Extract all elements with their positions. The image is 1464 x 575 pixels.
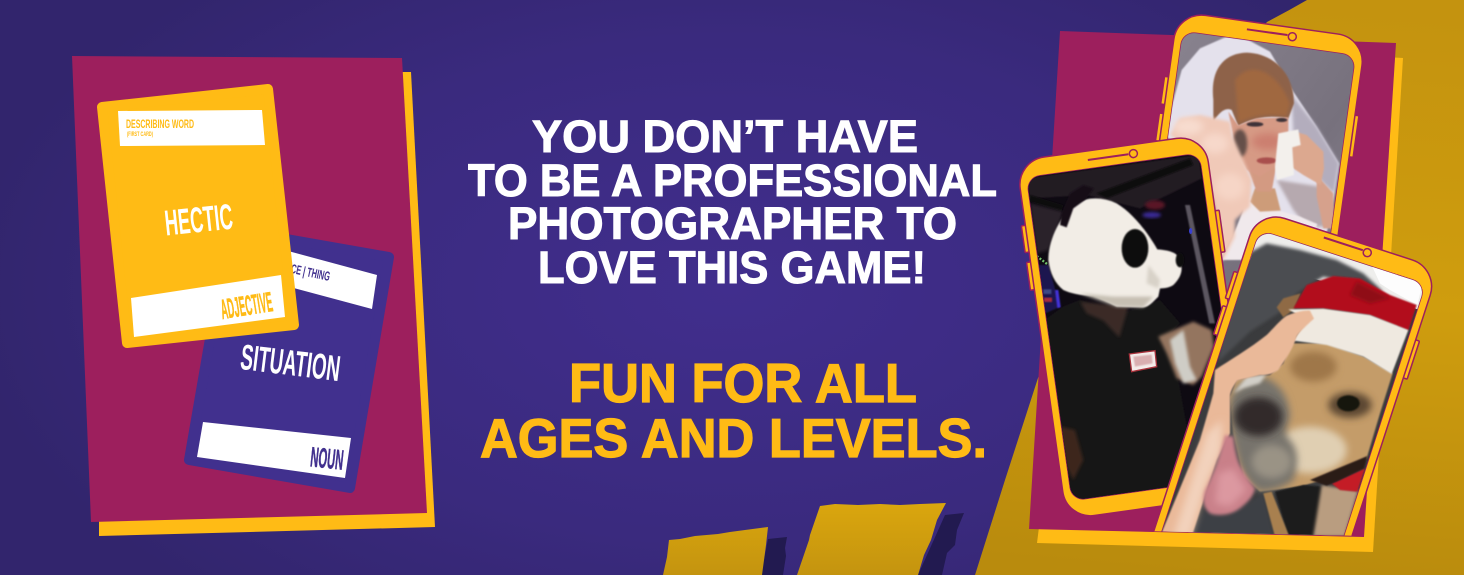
heading: main message: PHOTOGRAPHER TO [508,198,957,249]
purple noun card: SITUATION [238,336,343,389]
blurred hand [1158,322,1214,385]
party lights [1038,265,1060,313]
panel: game cards: ADJECTIVE [218,286,275,325]
maroon sheet [1029,31,1396,537]
dog fur [1230,343,1393,492]
panda eye patch [1122,229,1148,268]
face [1228,112,1288,177]
phone: dog in santa hat photo [1154,216,1432,536]
eye [1337,395,1360,411]
panda ear [1060,185,1094,227]
yellow adjective card: (FIRST CARD) [127,132,153,138]
heading: main message [468,111,997,293]
arm and hand [1317,175,1334,228]
subheading: fun for all [480,352,987,469]
gold diagonal background shape [975,0,1464,575]
panda nose [1176,253,1184,267]
neck [1080,302,1128,337]
pole [1185,205,1215,323]
hair [1213,53,1294,126]
panel: game cards [72,56,435,536]
white background [1250,234,1422,310]
ceiling [1027,155,1202,208]
name tag [1129,351,1157,372]
hat tan patch [1277,293,1301,317]
yellow adjective card: HECTIC [163,196,235,244]
maroon sheet [72,56,427,522]
blurred fist [1170,115,1252,260]
panda head [1048,198,1182,307]
heading: main message: TO BE A PROFESSIONAL [468,155,997,206]
torn gold stripes [663,503,964,575]
tongue [1203,435,1255,515]
hand and arm [1160,311,1314,537]
gray blanket [1218,243,1383,362]
yellow adjective card [102,89,294,343]
yellow adjective card: DESCRIBING WORD [126,117,194,131]
santa hat [1293,276,1417,331]
subheading: fun for all: FUN FOR ALL [569,352,917,414]
phone: bride photo [1156,14,1362,290]
muzzle [1230,377,1297,492]
heading: main message: YOU DON’T HAVE [532,111,918,162]
yellow backing sheet [99,72,435,536]
black shirt [1045,300,1187,503]
eyes and mouth [1247,122,1263,127]
red collar [1332,468,1365,492]
lower blanket, leg and skin [1192,498,1273,534]
tissue [1275,129,1301,180]
hat brim [1288,309,1408,374]
dress [1222,204,1318,261]
phone: panda mask photo [1019,137,1228,516]
purple noun card [189,229,389,488]
veil [1167,37,1339,233]
yellow backing sheet [1037,40,1403,552]
neck [1248,163,1277,192]
panel: phones with photos [1012,11,1443,575]
purple noun card: NOUN [309,441,345,476]
purple noun card: PERSON | PLACE | THING [238,250,331,284]
subheading: fun for all: AGES AND LEVELS. [480,407,987,469]
club glow [1145,200,1165,210]
blurred lower hand [1060,427,1083,480]
heading: main message: LOVE THIS GAME! [538,242,926,293]
